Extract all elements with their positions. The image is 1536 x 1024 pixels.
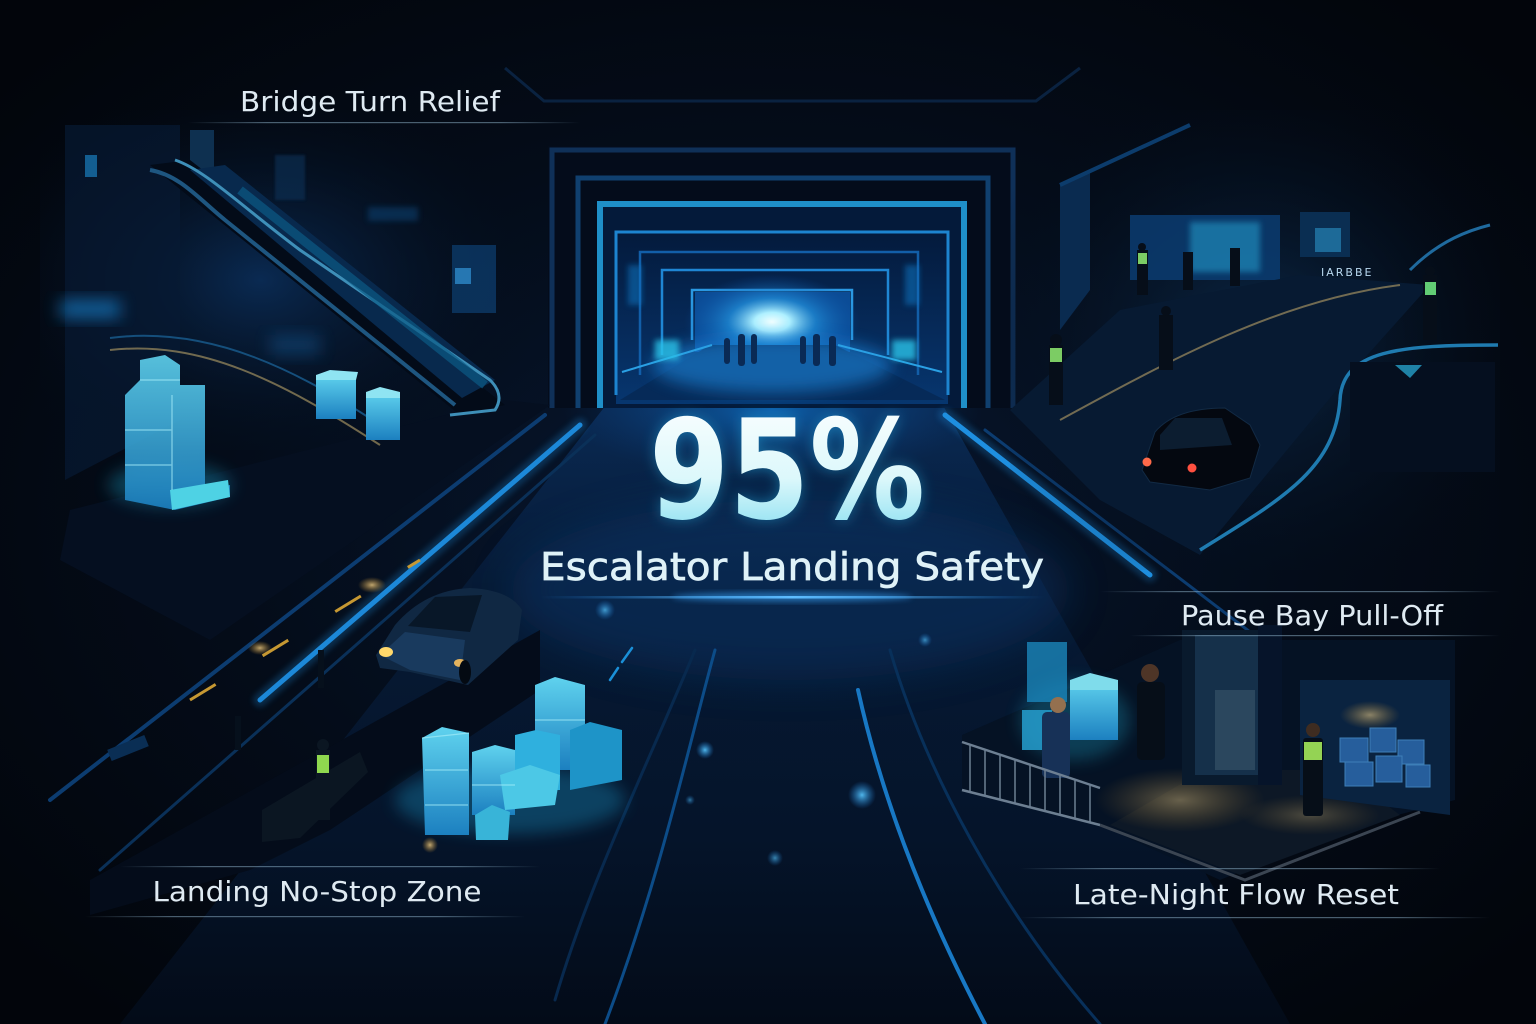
car: dark sedan [1142, 408, 1260, 490]
label: Late-Night Flow Reset: Late-Night Flow Reset [1073, 878, 1399, 911]
label: Landing No-Stop Zone: Landing No-Stop Zone [152, 875, 482, 908]
road light spots [595, 600, 932, 866]
icon: staff with barrier [262, 739, 368, 842]
panel: road and staff scene, top right [1010, 110, 1500, 570]
icon: small cubes [316, 370, 400, 440]
escalator [150, 160, 505, 415]
decorative glow under title [540, 592, 1045, 602]
sign text: IARBBE [1321, 266, 1373, 279]
label: Pause Bay Pull-Off: Pause Bay Pull-Off [1181, 599, 1444, 632]
upper framing lines [505, 68, 1080, 101]
icon: cube stack left [108, 355, 232, 510]
staff figures with vests [1049, 243, 1437, 405]
panel: central tunnel [548, 146, 1016, 408]
label: Bridge Turn Relief: Bridge Turn Relief [240, 85, 501, 118]
title: Escalator Landing Safety: Escalator Landing Safety [540, 545, 1044, 589]
icon: cubes behind fence [1020, 642, 1130, 760]
fence [962, 742, 1100, 825]
glowing road edge lines [50, 415, 1300, 1024]
people silhouettes in tunnel [724, 334, 836, 366]
icon: doorway [1182, 625, 1450, 815]
big number: 95% [649, 390, 925, 551]
icon: blue crates [1340, 728, 1430, 787]
panel: plaza with fence and staff, bottom right [962, 625, 1455, 880]
panel: escalator scene, top left [40, 110, 550, 640]
icon: cube city [395, 677, 625, 840]
panel: road surface [120, 340, 1290, 1024]
people in plaza [1042, 664, 1323, 816]
big number: 95% [649, 390, 925, 551]
car: blue sedan [376, 588, 522, 685]
panel: car and barriers, bottom left [90, 560, 625, 915]
